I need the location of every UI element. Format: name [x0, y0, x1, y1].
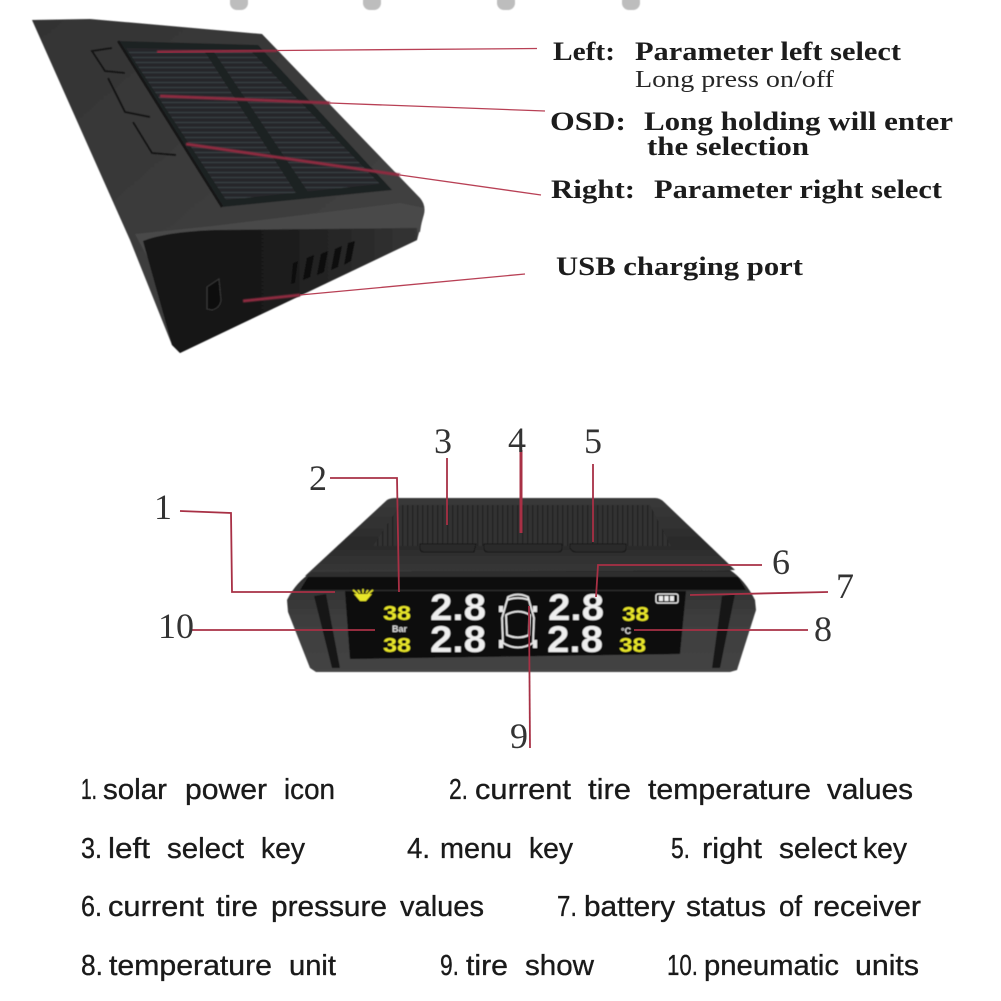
- callout: Left: Long press on/off: [635, 67, 834, 93]
- callout: OSD: the selection: [647, 132, 810, 161]
- legend row 1: [81, 774, 913, 806]
- callout: Right: Right:: [551, 175, 635, 204]
- callout lines for top device: [157, 48, 545, 301]
- legend row 4: units: [855, 950, 919, 982]
- legend row 4: 8.: [81, 950, 103, 982]
- legend row 3: 6.: [81, 891, 102, 923]
- callout: Left: [553, 37, 901, 93]
- legend row 4: 10.: [667, 950, 698, 982]
- legend row 2: 5.: [671, 833, 690, 865]
- legend row 3: tire: [216, 891, 258, 923]
- left readout: 38: [383, 635, 411, 657]
- left readout: [383, 603, 411, 657]
- legend row 1: tire: [588, 774, 631, 806]
- legend row 4: show: [525, 950, 595, 982]
- left readout: Bar: [392, 624, 408, 634]
- device buttons: [92, 48, 176, 155]
- device body top face: [32, 19, 424, 353]
- number labels: 3: [434, 421, 452, 461]
- number labels: 4: [508, 420, 526, 460]
- pressure readout left: 2.8: [430, 619, 486, 660]
- legend row 2: select: [779, 833, 857, 865]
- legend row 2: select: [167, 833, 244, 865]
- device front face: [143, 228, 417, 353]
- right readout: °C: [621, 626, 632, 636]
- left readout: 38: [383, 603, 411, 625]
- legend row 2: left: [108, 833, 150, 865]
- callout lines for front device: [180, 450, 828, 748]
- pressure readout right: 2.8: [548, 587, 604, 628]
- legend row 3: status: [686, 891, 766, 923]
- USB port: [207, 279, 221, 310]
- number labels: 5: [584, 421, 602, 461]
- device bevel edge: [135, 203, 424, 262]
- legend row 3: [81, 891, 921, 923]
- number labels: 1: [154, 487, 172, 527]
- legend row 2: right: [702, 833, 762, 865]
- number labels: 6: [772, 542, 790, 582]
- icon: sun: [353, 589, 373, 601]
- callout: Right: Parameter right select: [654, 175, 942, 204]
- pressure readout left: [430, 587, 486, 660]
- legend row 2: [81, 833, 907, 865]
- callout: OSD: [550, 107, 953, 161]
- callout: OSD: OSD:: [550, 107, 626, 136]
- legend row 3: pressure: [271, 891, 387, 923]
- legend row 1: power: [185, 774, 267, 806]
- right readout: 38: [619, 635, 646, 657]
- number labels: 2: [309, 458, 327, 498]
- number labels: 8: [814, 609, 832, 649]
- legend row 1: temperature: [648, 774, 811, 806]
- legend row 3: of: [779, 891, 803, 923]
- legend row 1: values: [827, 774, 913, 806]
- pressure readout right: [547, 587, 604, 660]
- legend row 1: icon: [284, 774, 335, 806]
- legend row 4: unit: [289, 950, 336, 982]
- legend row 2: 4.: [407, 833, 430, 865]
- screw thumbnails: [230, 0, 640, 10]
- legend row 1: current: [475, 774, 571, 806]
- legend row 1: solar: [103, 774, 167, 806]
- legend row 3: receiver: [813, 891, 921, 923]
- legend row 3: values: [400, 891, 484, 923]
- callout: Left: Left:: [553, 37, 615, 66]
- legend row 4: temperature: [109, 950, 272, 982]
- air vents: [291, 241, 355, 284]
- body top: [305, 498, 735, 576]
- number labels: 9: [510, 716, 528, 756]
- legend row 2: key: [863, 833, 907, 865]
- callout: OSD: Long holding will enter: [644, 107, 953, 136]
- legend row 1: 2.: [449, 774, 468, 806]
- legend row 2: key: [529, 833, 573, 865]
- LCD screen: [345, 591, 686, 659]
- legend row 1: 1.: [81, 774, 97, 806]
- legend row 4: 9.: [440, 950, 459, 982]
- buttons: [420, 544, 626, 552]
- number labels: 10: [158, 606, 194, 646]
- legend row 3: battery: [584, 891, 675, 923]
- legend row 2: 3.: [81, 833, 102, 865]
- callout: USB: USB charging port: [556, 252, 803, 281]
- right readout: [619, 604, 649, 657]
- callout: Left: Parameter left select: [635, 37, 901, 66]
- solar panel: [118, 41, 392, 207]
- callout: Right: [551, 175, 942, 204]
- number labels: 7: [836, 566, 854, 606]
- legend row 3: 7.: [557, 891, 577, 923]
- device photo: angled receiver with solar panel: [32, 19, 424, 353]
- front bezel: [287, 570, 756, 672]
- legend row 4: [81, 950, 919, 982]
- device photo: front view with LCD: [287, 498, 756, 672]
- legend row 4: pneumatic: [704, 950, 839, 982]
- icon: battery: [656, 594, 678, 603]
- pressure readout left: 2.8: [430, 587, 486, 628]
- legend row 4: tire: [466, 950, 508, 982]
- legend list: [81, 774, 921, 982]
- right readout: 38: [622, 604, 649, 626]
- solar panel strip: [373, 505, 671, 546]
- icon: car: [501, 594, 535, 648]
- legend row 3: current: [108, 891, 204, 923]
- number labels: [154, 420, 854, 756]
- pressure readout right: 2.8: [547, 619, 603, 660]
- legend row 2: key: [261, 833, 305, 865]
- legend row 2: menu: [440, 833, 512, 865]
